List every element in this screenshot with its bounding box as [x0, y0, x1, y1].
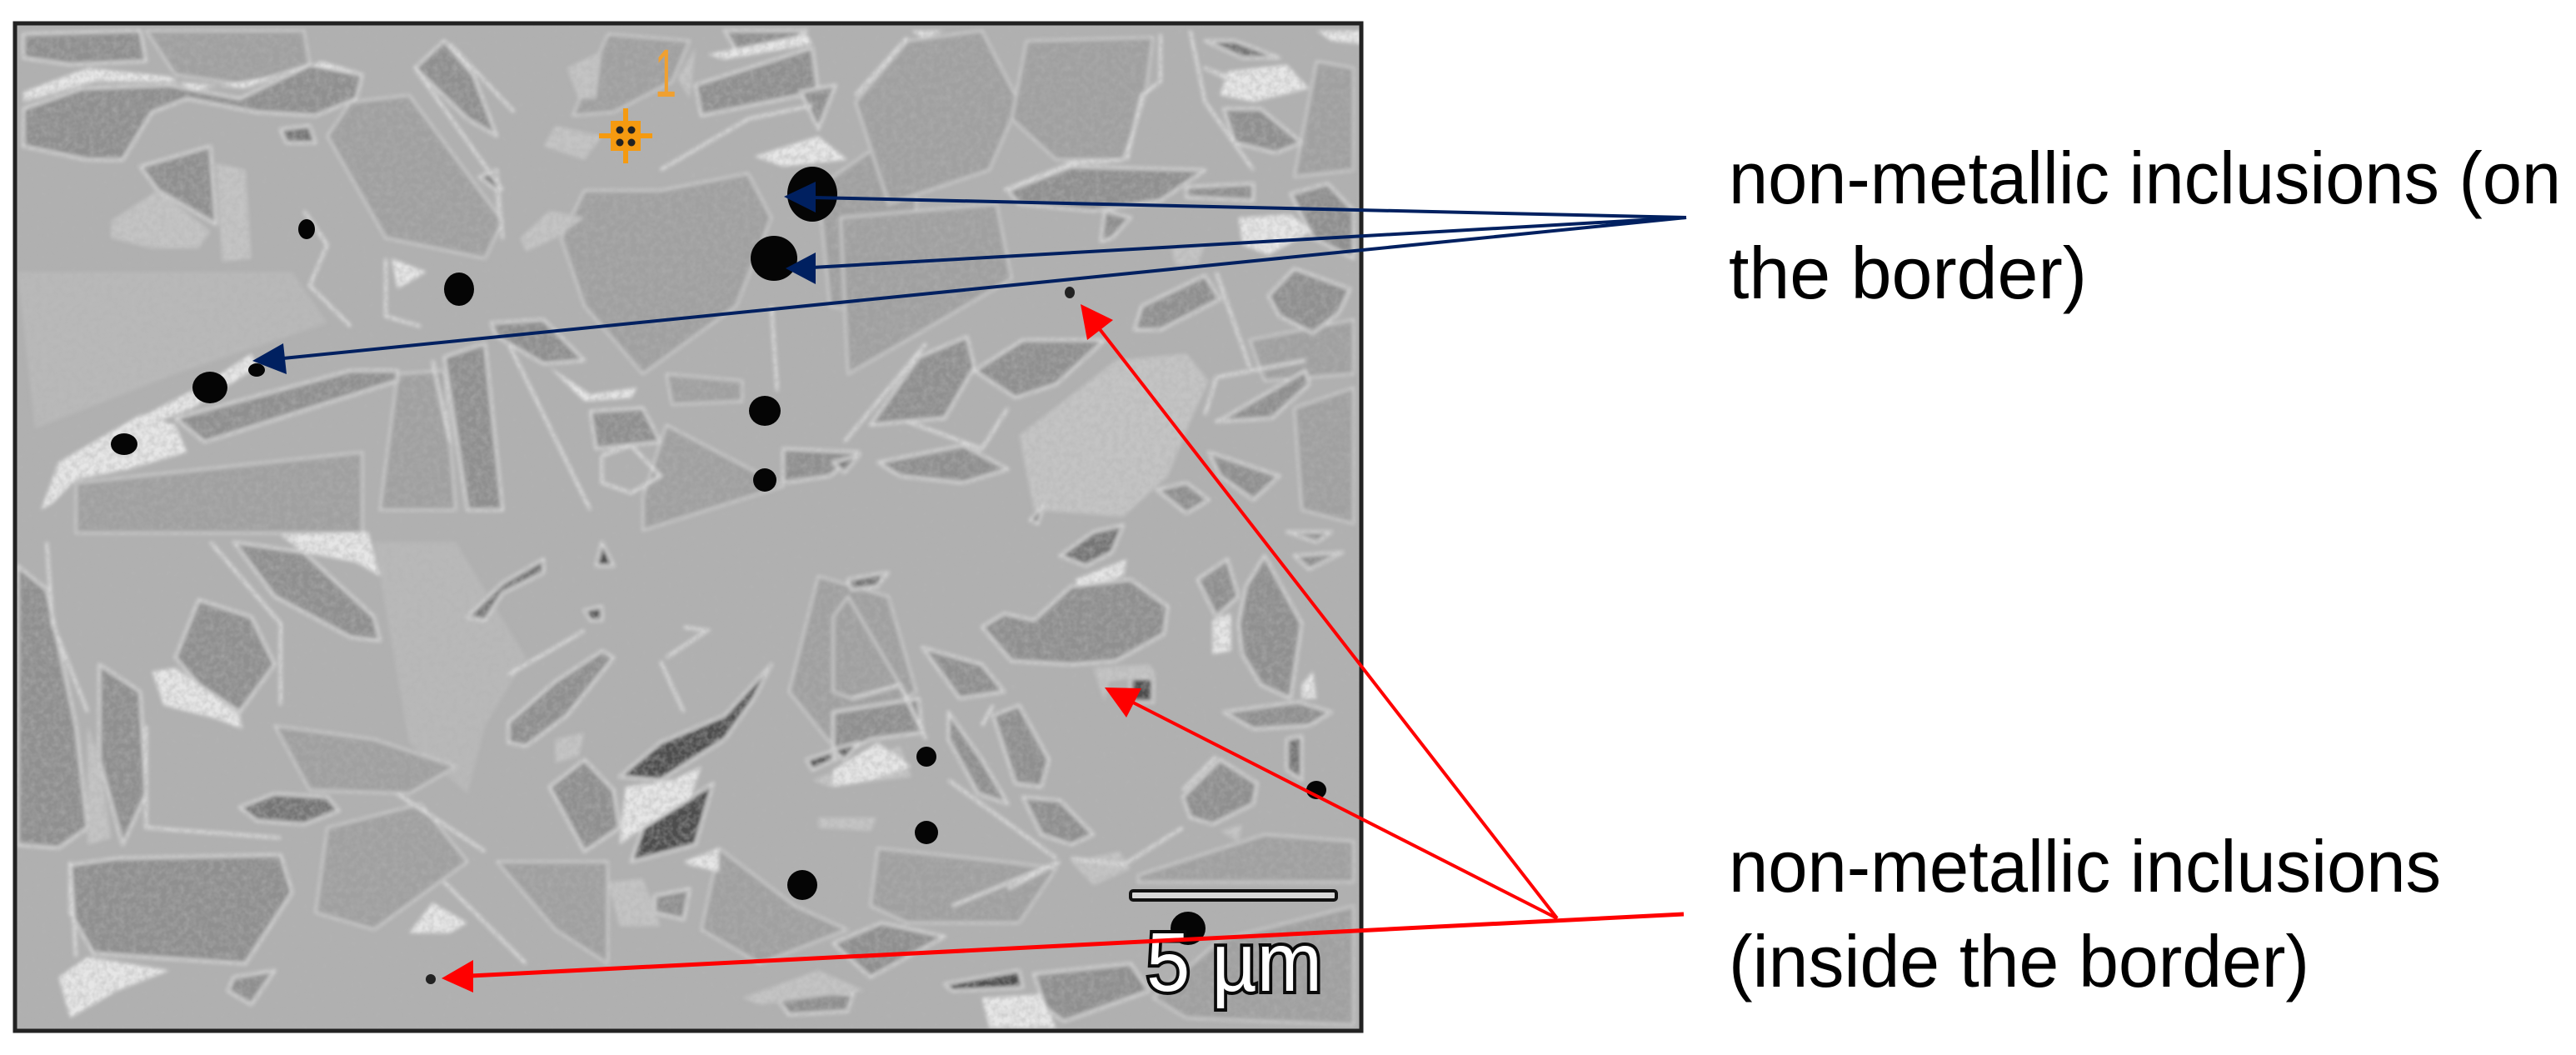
icon: orange crosshair marker [599, 108, 652, 163]
marker number label: 1 [655, 36, 676, 112]
arrow: to top large inclusion [784, 182, 1686, 218]
label: inclusions inside the border: (inside the border) [1729, 920, 2309, 1002]
scale bar label: 5 µm [1146, 916, 1322, 1009]
panel: SEM micrograph [15, 23, 1361, 1031]
black inclusions [111, 167, 1326, 984]
label: inclusions inside the border [1729, 825, 2441, 1002]
arrow: to upper inclusion [1081, 304, 1557, 918]
label: inclusions on the border: non-metallic inclusions (on [1729, 137, 2561, 219]
label: inclusions on the border: the border) [1729, 232, 2087, 314]
arrow: to central inclusion [1105, 688, 1557, 918]
micrograph frame [15, 23, 1361, 1031]
arrow: to second large inclusion [786, 218, 1686, 284]
label: inclusions inside the border: non-metallic inclusions [1729, 825, 2441, 908]
arrows: inclusions on the border [252, 182, 1686, 374]
scale bar [1131, 891, 1336, 900]
arrow: to small left inclusion [252, 218, 1686, 374]
arrow: to lower-left inclusion [442, 914, 1684, 992]
micrograph texture: steel grains [15, 23, 1361, 1031]
arrows: inclusions inside the border [442, 304, 1684, 992]
label: inclusions on the border [1729, 137, 2561, 314]
